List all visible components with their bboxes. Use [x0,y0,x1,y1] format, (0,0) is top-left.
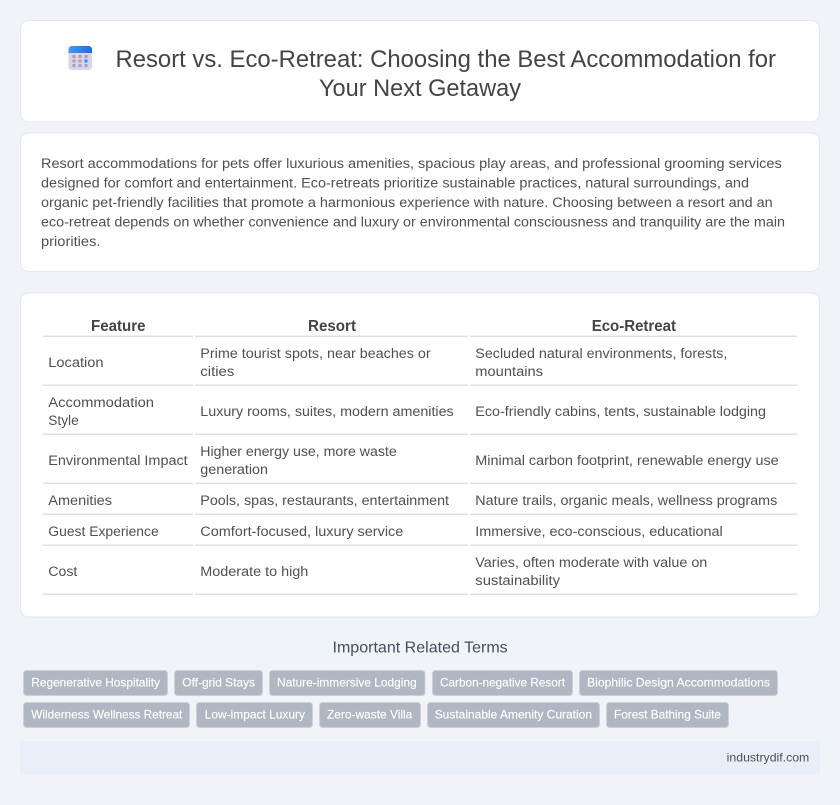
table row: cost: Varies, often moderate with value on [475,555,707,571]
tag: low-impact luxury [196,702,312,728]
table row: environmental impact: Environmental Impact [48,453,188,469]
table header row: Eco-Retreat [592,318,677,335]
table row: guest experience [43,524,797,546]
tag: regenerative hospitality: Regenerative Hospitality [31,676,160,690]
tag: low-impact luxury: Low-impact Luxury [205,708,305,722]
panel: header [20,20,820,122]
tag: forest bathing suite: Forest Bathing Suite [614,708,721,722]
table row: environmental impact: generation [200,462,268,478]
table row: location: mountains [475,364,543,380]
table row: accommodation style: Luxury rooms, suites, modern amenities [200,404,454,420]
text block: summary: organic pet-friendly facilities that promote a harmonious experience with nature. Choosing between a resort and an [41,195,773,211]
table row: amenities: Amenities [48,493,112,509]
tag: biophilic design accommodations [580,670,778,696]
tag: nature-immersive lodging: Nature-immersive Lodging [277,676,417,690]
tag: zero-waste villa [320,702,420,728]
tag: wilderness wellness retreat: Wilderness Wellness Retreat [31,708,183,722]
title: Your Next Getaway [319,75,521,102]
table row: guest experience: Comfort-focused, luxury service [200,524,403,540]
tag: nature-immersive lodging [270,670,425,696]
table row: cost: Moderate to high [200,564,308,580]
table row: guest experience: Guest Experience [48,524,159,540]
table row: accommodation style: Style [48,413,79,429]
tag: carbon-negative resort [432,670,572,696]
table row: location: Prime tourist spots, near beaches or [200,346,431,362]
tag list: related terms [24,670,778,728]
table header row [43,318,797,337]
table header row: Resort [308,318,357,335]
table row: guest experience: Immersive, eco-conscious, educational [475,524,723,540]
panel: comparison table [20,293,820,617]
table row: location: Location [48,355,104,371]
table row: amenities [43,493,797,515]
table row: amenities: Nature trails, organic meals, wellness programs [475,493,777,509]
table row: location [43,346,797,386]
text block: summary: Resort accommodations for pets offer luxurious amenities, spacious play areas, and professional grooming services [41,156,782,172]
tag: sustainable amenity curation: Sustainable Amenity Curation [435,708,592,722]
tag: sustainable amenity curation [428,702,600,728]
table row: cost: Cost [48,564,77,580]
table row: location: Secluded natural environments, forests, [475,346,727,362]
table row: amenities: Pools, spas, restaurants, entertainment [200,493,449,509]
tag: off-grid stays [174,670,262,696]
text block: summary [41,156,785,250]
tag: zero-waste villa: Zero-waste Villa [327,708,413,722]
title [116,46,776,102]
tag: wilderness wellness retreat [24,702,190,728]
text block: summary: designed for comfort and entertainment. Eco-retreats prioritize sustainable practices, natural surroundings, and [41,176,749,192]
tag: regenerative hospitality [24,670,168,696]
table row: environmental impact: Minimal carbon footprint, renewable energy use [475,453,779,469]
footer bar: industrydif.com [727,751,809,765]
tag: off-grid stays: Off-grid Stays [182,676,255,690]
table row: environmental impact [43,444,797,484]
tag: carbon-negative resort: Carbon-negative Resort [440,676,566,690]
table row: accommodation style [43,395,797,435]
tag: forest bathing suite [606,702,728,728]
text block: summary: eco-retreat depends on whether convenience and luxury or environmental consciousness and tranquility are the main [41,214,785,230]
panel: intro paragraph [20,133,820,272]
icon: calendar [68,46,92,70]
table row: accommodation style: Eco-friendly cabins, tents, sustainable lodging [475,404,766,420]
table row: cost: sustainability [475,573,561,589]
text block: summary: priorities. [41,234,100,250]
table row: accommodation style: Accommodation [48,395,154,411]
table row: location: cities [200,364,234,380]
title: Resort vs. Eco-Retreat: Choosing the Best Accommodation for [116,46,776,73]
tag: biophilic design accommodations: Biophilic Design Accommodations [587,676,770,690]
table row: environmental impact: Higher energy use, more waste [200,444,397,460]
heading: important related terms: Important Related Terms [332,640,508,657]
table row: cost [43,555,797,595]
table header row: Feature [91,318,146,335]
footer bar [20,741,820,775]
